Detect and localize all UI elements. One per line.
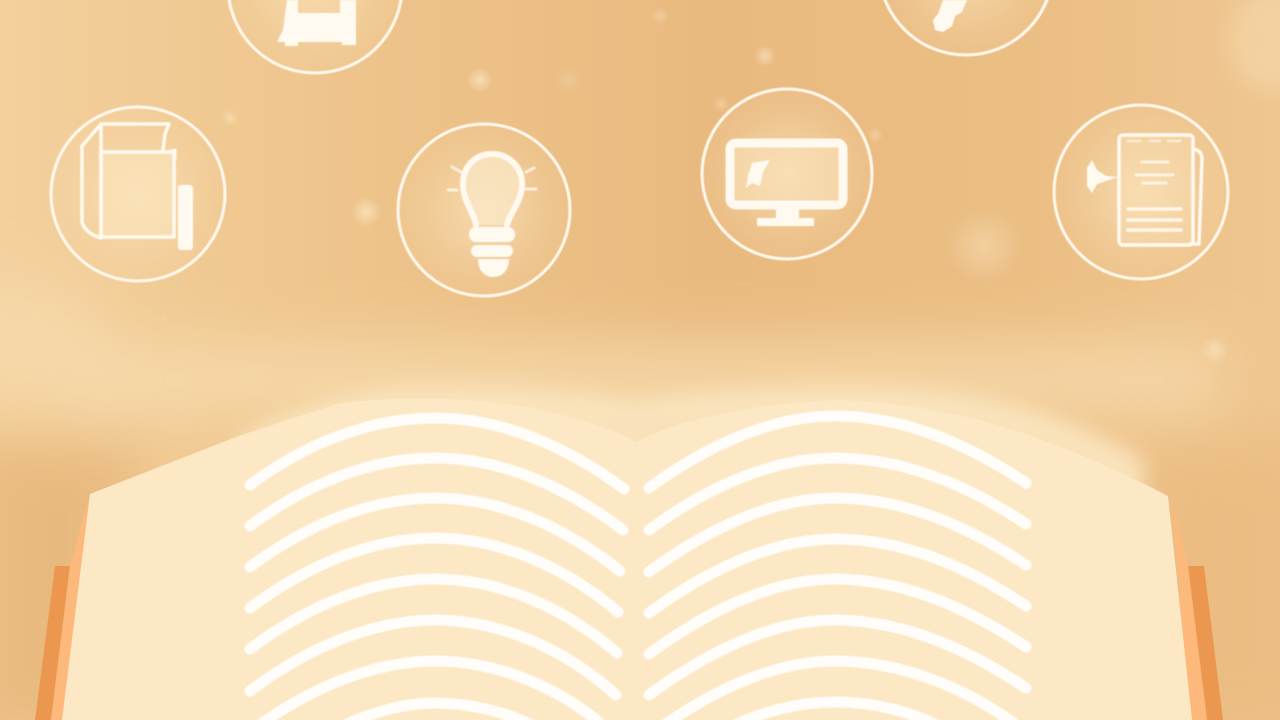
icon: top-left circle with book stand bbox=[228, 0, 402, 73]
text lines: right page bbox=[649, 416, 1026, 720]
open book bbox=[35, 386, 1223, 720]
text lines: left page bbox=[250, 418, 624, 720]
book cover: left edge bbox=[35, 500, 92, 720]
glowing sparkles bbox=[221, 7, 1229, 364]
icon: light bulb bbox=[398, 124, 570, 296]
book cover: right edge bbox=[1172, 498, 1223, 720]
icon: top-right circle with feather bbox=[879, 0, 1053, 55]
icon: documents bbox=[1054, 105, 1228, 279]
icon: books bbox=[51, 107, 225, 281]
icon: computer monitor bbox=[702, 89, 872, 259]
book pages bbox=[62, 399, 1192, 720]
book glow above pages bbox=[240, 386, 1145, 520]
